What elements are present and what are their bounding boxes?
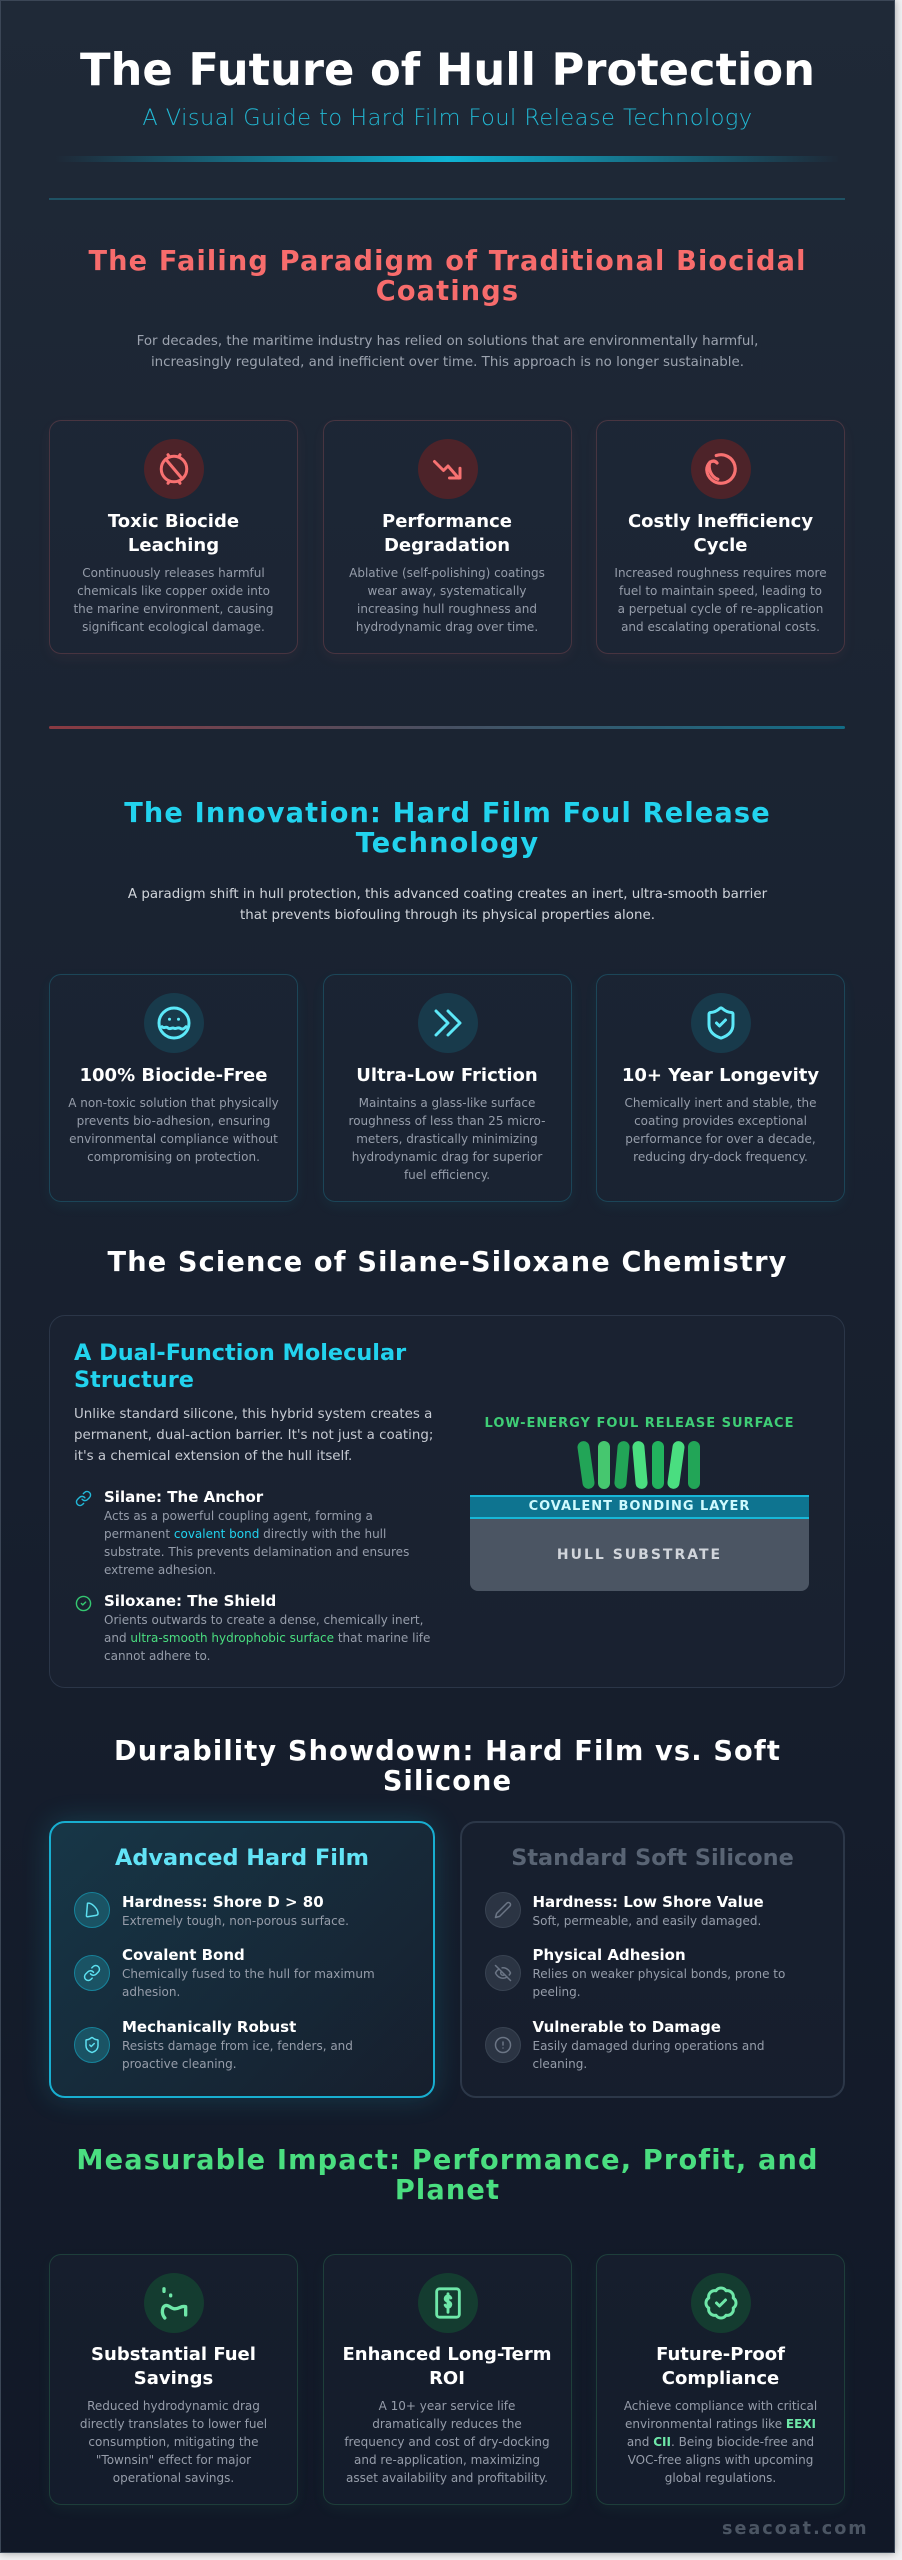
card text bbox=[624, 2399, 817, 2485]
panel: ultra-low friction bbox=[322, 974, 572, 1202]
card title: Cycle bbox=[694, 535, 748, 556]
card title bbox=[108, 511, 239, 556]
item: hardness bbox=[74, 1892, 349, 1928]
panel title: Standard Soft Silicone bbox=[511, 1845, 794, 1871]
icon: biocide bbox=[144, 439, 204, 499]
icon: link bbox=[74, 1955, 110, 1991]
icon: chevrons bbox=[418, 993, 478, 1053]
item: vulnerable to damage bbox=[485, 2018, 765, 2071]
item title: Hardness: Low Shore Value bbox=[532, 1893, 764, 1911]
card text: prevents bio-adhesion, ensuring bbox=[77, 1114, 270, 1128]
item: low hardness bbox=[485, 1892, 764, 1928]
card text: fuel to maintain speed, leading to bbox=[619, 584, 822, 598]
panel: performance degradation bbox=[322, 420, 572, 654]
card title bbox=[656, 2344, 786, 2389]
icon: face bbox=[144, 993, 204, 1053]
heading: failing paradigm: The Failing Paradigm of Traditional Biocidal bbox=[88, 246, 807, 277]
item text bbox=[532, 1967, 785, 1999]
card text bbox=[344, 2399, 550, 2485]
item text bbox=[122, 1967, 375, 1999]
heading: measurable impact bbox=[76, 2145, 819, 2206]
siloxane title: Siloxane: The Shield bbox=[104, 1592, 276, 1610]
item: covalent bond bbox=[74, 1946, 375, 1999]
molecular heading bbox=[74, 1340, 406, 1392]
panel: costly inefficiency cycle bbox=[596, 420, 845, 654]
bonding layer bbox=[470, 1495, 809, 1519]
card title: Costly Inefficiency bbox=[628, 511, 813, 532]
siloxane text: Orients outwards to create a dense, chemically inert, bbox=[104, 1613, 423, 1627]
icon: shield bbox=[74, 2027, 110, 2063]
card title: Performance bbox=[382, 511, 512, 532]
card text: meters, drastically minimizing bbox=[356, 1132, 538, 1146]
card text: environmental compliance without bbox=[69, 1132, 278, 1146]
diagram: coating layers bbox=[470, 1416, 809, 1591]
silane title: Silane: The Anchor bbox=[104, 1488, 263, 1506]
molecular intro bbox=[74, 1407, 433, 1464]
card text: A non-toxic solution that physically bbox=[68, 1096, 279, 1110]
panel: longevity bbox=[596, 974, 845, 1202]
card title: 100% Biocide-Free bbox=[80, 1065, 267, 1086]
heading: science: The Science of Silane-Siloxane Chemistry bbox=[108, 1247, 788, 1278]
item text: Relies on weaker physical bonds, prone to bbox=[532, 1967, 785, 1981]
siloxane text bbox=[104, 1613, 430, 1663]
card title: Toxic Biocide bbox=[108, 511, 239, 532]
card text: directly translates to lower fuel bbox=[80, 2417, 267, 2431]
icon: link bbox=[76, 1490, 92, 1506]
card text: compromising on protection. bbox=[87, 1150, 260, 1164]
card text bbox=[624, 1096, 817, 1164]
card text bbox=[349, 1096, 545, 1182]
item text: Resists damage from ice, fenders, and bbox=[122, 2039, 353, 2053]
card text: Reduced hydrodynamic drag bbox=[87, 2399, 260, 2413]
intro text: innovation: that prevents biofouling through its physical properties alone. bbox=[240, 908, 655, 923]
heading: failing paradigm bbox=[88, 246, 807, 307]
molecular heading: Structure bbox=[74, 1366, 194, 1392]
card title: Enhanced Long-Term bbox=[342, 2344, 552, 2365]
card text: asset availability and profitability. bbox=[346, 2471, 548, 2485]
card text: reducing dry-dock frequency. bbox=[633, 1150, 808, 1164]
card text: the marine environment, causing bbox=[73, 602, 274, 616]
bonding layer: COVALENT BONDING LAYER bbox=[529, 1499, 750, 1514]
heading: durability: Durability Showdown: Hard Film vs. Soft bbox=[114, 1736, 781, 1767]
siloxane bars bbox=[578, 1441, 700, 1489]
molecular intro: permanent, dual-action barrier. It's not just a coating; bbox=[74, 1428, 433, 1443]
card text bbox=[73, 566, 274, 634]
card text: wear away, systematically bbox=[367, 584, 527, 598]
card text: hydrodynamic drag for superior bbox=[352, 1150, 542, 1164]
molecular intro: it's a chemical extension of the hull itself. bbox=[74, 1449, 352, 1464]
card text: Increased roughness requires more bbox=[614, 566, 827, 580]
heading: measurable impact: Planet bbox=[395, 2175, 500, 2206]
card text: operational savings. bbox=[113, 2471, 234, 2485]
card text bbox=[80, 2399, 267, 2485]
card text: significant ecological damage. bbox=[82, 620, 265, 634]
icon: pencil bbox=[484, 1892, 520, 1928]
card text: hydrodynamic drag over time. bbox=[356, 620, 538, 634]
item text: adhesion. bbox=[122, 1985, 180, 1999]
brand watermark: seacoat.com bbox=[722, 2519, 869, 2539]
icon: fuel bbox=[144, 2273, 204, 2333]
card text: and escalating operational costs. bbox=[621, 620, 820, 634]
surface label: LOW-ENERGY FOUL RELEASE SURFACE bbox=[484, 1416, 794, 1431]
card text: dramatically reduces the bbox=[372, 2417, 522, 2431]
card title: Degradation bbox=[384, 535, 510, 556]
header glow line bbox=[55, 156, 840, 162]
card text: global regulations. bbox=[665, 2471, 776, 2485]
item text bbox=[532, 2039, 765, 2071]
heading: innovation bbox=[124, 798, 771, 859]
heading: durability bbox=[114, 1736, 781, 1797]
icon: cycle bbox=[691, 439, 751, 499]
silane text: extreme adhesion. bbox=[104, 1563, 216, 1577]
icon: badge check bbox=[691, 2273, 751, 2333]
section divider bbox=[49, 726, 845, 729]
icon: shield check bbox=[691, 993, 751, 1053]
card text: environmental ratings like EEXI bbox=[625, 2417, 816, 2431]
hull substrate bbox=[470, 1519, 809, 1591]
item text: Easily damaged during operations and bbox=[532, 2039, 765, 2053]
panel title: Advanced Hard Film bbox=[115, 1845, 369, 1871]
panel: long-term ROI bbox=[322, 2254, 572, 2505]
panel: toxic biocide leaching bbox=[49, 420, 298, 654]
icon: alert bbox=[484, 2027, 520, 2063]
panel: standard soft silicone bbox=[460, 1821, 845, 2098]
card text: consumption, mitigating the bbox=[88, 2435, 259, 2449]
card text: A 10+ year service life bbox=[379, 2399, 515, 2413]
card text: Continuously releases harmful bbox=[82, 566, 265, 580]
panel: advanced hard film bbox=[49, 1821, 434, 2098]
card text: a perpetual cycle of re-application bbox=[618, 602, 823, 616]
item title: Mechanically Robust bbox=[122, 2018, 296, 2036]
molecular heading: A Dual-Function Molecular bbox=[74, 1340, 406, 1366]
card text: chemicals like copper oxide into bbox=[77, 584, 270, 598]
siloxane text: and ultra-smooth hydrophobic surface that marine life bbox=[104, 1631, 430, 1645]
card text bbox=[349, 566, 545, 634]
card text: increasing hull roughness and bbox=[357, 602, 537, 616]
card text: Achieve compliance with critical bbox=[624, 2399, 817, 2413]
panel: biocide free bbox=[49, 974, 298, 1202]
card title: ROI bbox=[429, 2368, 465, 2389]
card title: Leaching bbox=[128, 535, 219, 556]
silane text: Acts as a powerful coupling agent, forming a bbox=[104, 1509, 373, 1523]
item text bbox=[122, 2039, 353, 2071]
icon: eye off bbox=[484, 1955, 520, 1991]
card text: fuel efficiency. bbox=[404, 1168, 490, 1182]
header divider bbox=[49, 198, 845, 200]
icon: dollar bbox=[418, 2273, 478, 2333]
card title: Substantial Fuel bbox=[91, 2344, 256, 2365]
icon: shore D bbox=[74, 1892, 110, 1928]
card text: Ablative (self-polishing) coatings bbox=[349, 566, 545, 580]
item text: Chemically fused to the hull for maximum bbox=[122, 1967, 375, 1981]
item text: cleaning. bbox=[532, 2057, 587, 2071]
silane text: permanent covalent bond directly with the hull bbox=[104, 1527, 386, 1541]
card title bbox=[342, 2344, 552, 2389]
item title: Hardness: Shore D > 80 bbox=[122, 1893, 324, 1911]
card text: performance for over a decade, bbox=[625, 1132, 816, 1146]
card title: Ultra-Low Friction bbox=[356, 1065, 538, 1086]
item title: Covalent Bond bbox=[122, 1946, 245, 1964]
card text bbox=[68, 1096, 279, 1164]
intro text: innovation: A paradigm shift in hull protection, this advanced coating creates an inert, ultra-smooth barrier bbox=[128, 887, 767, 902]
intro text: failing paradigm: increasingly regulated, and inefficient over time. This approach is no longer sustainable. bbox=[151, 355, 744, 370]
intro text: failing paradigm bbox=[137, 334, 758, 370]
item: physical adhesion bbox=[485, 1946, 785, 1999]
molecular intro: Unlike standard silicone, this hybrid system creates a bbox=[74, 1407, 432, 1422]
card title bbox=[382, 511, 512, 556]
item title: Physical Adhesion bbox=[532, 1946, 686, 1964]
card text: "Townsin" effect for major bbox=[96, 2453, 251, 2467]
item text: proactive cleaning. bbox=[122, 2057, 237, 2071]
card text: frequency and cost of dry-docking bbox=[344, 2435, 550, 2449]
icon: trending down bbox=[418, 439, 478, 499]
panel: fuel savings bbox=[49, 2254, 298, 2505]
intro text: innovation bbox=[128, 887, 768, 923]
panel: future-proof compliance bbox=[596, 2254, 845, 2505]
silane text bbox=[104, 1509, 409, 1577]
card title bbox=[91, 2344, 256, 2389]
panel: molecular structure bbox=[49, 1315, 845, 1688]
card text: VOC-free aligns with upcoming bbox=[628, 2453, 813, 2467]
item text: peeling. bbox=[532, 1985, 581, 1999]
item text: Soft, permeable, and easily damaged. bbox=[532, 1914, 761, 1928]
card title: Future-Proof bbox=[656, 2344, 785, 2365]
silane text: substrate. This prevents delamination and ensures bbox=[104, 1545, 409, 1559]
heading: failing paradigm: Coatings bbox=[376, 276, 519, 307]
card title: Savings bbox=[134, 2368, 213, 2389]
card text: Chemically inert and stable, the bbox=[624, 1096, 817, 1110]
title: The Future of Hull Protection bbox=[80, 43, 815, 96]
card title bbox=[628, 511, 813, 556]
heading: measurable impact: Measurable Impact: Performance, Profit, and bbox=[76, 2145, 819, 2176]
subtitle: A Visual Guide to Hard Film Foul Release Technology bbox=[142, 105, 753, 131]
card text: roughness of less than 25 micro- bbox=[349, 1114, 545, 1128]
item title: Vulnerable to Damage bbox=[532, 2018, 721, 2036]
item text: Extremely tough, non-porous surface. bbox=[122, 1914, 349, 1928]
heading: innovation: Technology bbox=[356, 828, 539, 859]
icon: check circle bbox=[76, 1596, 92, 1612]
card text: and re-application, maximizing bbox=[354, 2453, 540, 2467]
heading: innovation: The Innovation: Hard Film Foul Release bbox=[124, 798, 771, 829]
hull substrate: HULL SUBSTRATE bbox=[557, 1547, 722, 1563]
intro text: failing paradigm: For decades, the maritime industry has relied on solutions that are environmentally harmful, bbox=[137, 334, 758, 349]
card text bbox=[614, 566, 827, 634]
card text: and CII. Being biocide-free and bbox=[627, 2435, 814, 2449]
card text: coating provides exceptional bbox=[634, 1114, 807, 1128]
card title: 10+ Year Longevity bbox=[622, 1065, 819, 1086]
card title: Compliance bbox=[662, 2368, 779, 2389]
siloxane text: cannot adhere to. bbox=[104, 1649, 210, 1663]
heading: durability: Silicone bbox=[383, 1766, 512, 1797]
card text: Maintains a glass-like surface bbox=[359, 1096, 535, 1110]
item: mechanically robust bbox=[74, 2018, 353, 2071]
